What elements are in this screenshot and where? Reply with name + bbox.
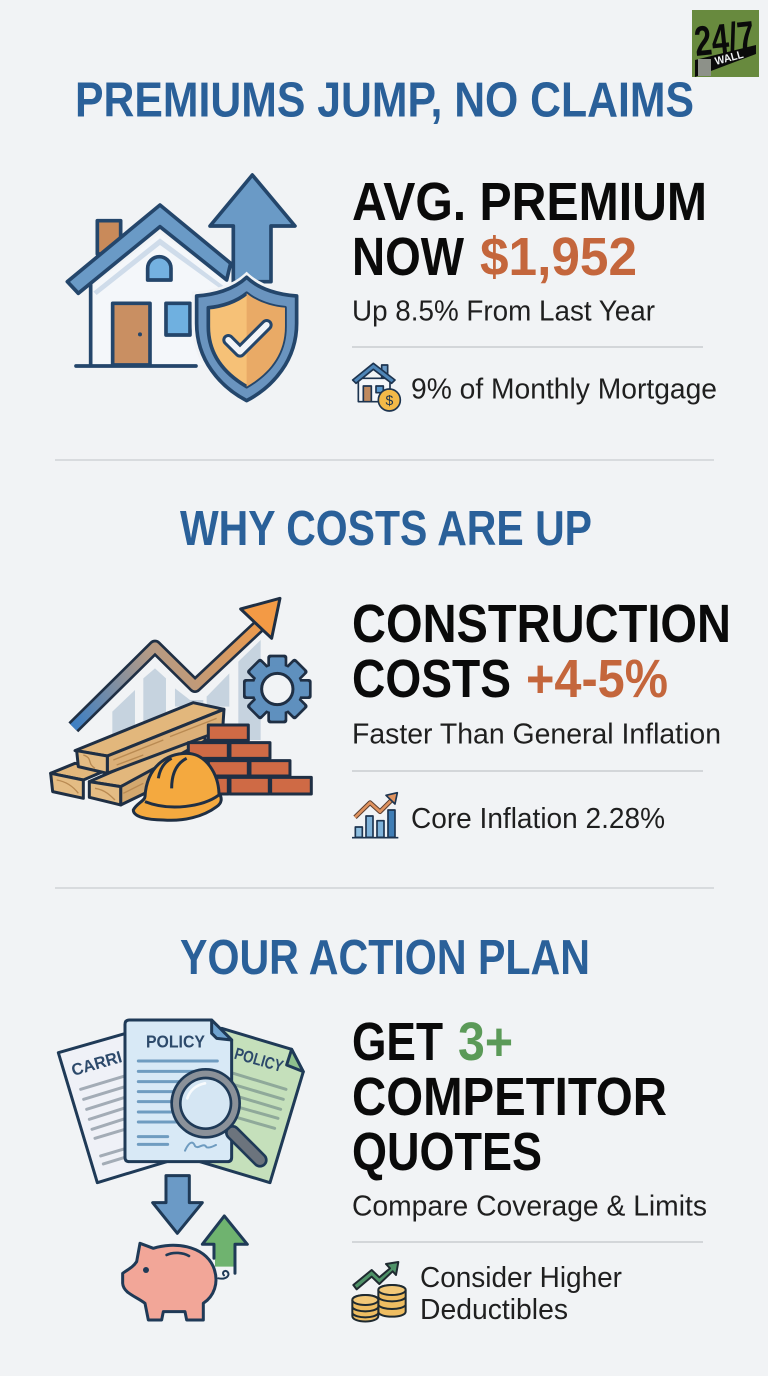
detail: consider higher deductibles: Consider Higher <box>420 1262 622 1294</box>
headline: quotes: QUOTES <box>352 1122 542 1182</box>
headline: cost increase: +4-5% <box>526 649 668 709</box>
headline: premium amount: $1,952 <box>480 227 637 287</box>
icon: house with dollar coin <box>353 363 400 411</box>
heading: your action plan: YOUR ACTION PLAN <box>180 931 590 985</box>
icon: policy documents, magnifier and piggy bank: CARRI <box>69 1047 124 1080</box>
title: PREMIUMS JUMP, NO CLAIMS <box>75 74 694 128</box>
headline: costs label: COSTS <box>352 649 511 709</box>
detail: share of mortgage: 9% of Monthly Mortgage <box>411 374 717 406</box>
logo: 24/7 Wall St: WALL <box>714 49 745 68</box>
detail: core inflation: Core Inflation 2.28% <box>411 803 665 835</box>
detail: consider higher deductibles <box>420 1262 622 1326</box>
icon: policy documents, magnifier and piggy bank <box>58 1020 303 1320</box>
panel: average premium <box>67 172 717 411</box>
headline: number of quotes: 3+ <box>458 1012 513 1072</box>
heading: why costs are up: WHY COSTS ARE UP <box>180 502 592 556</box>
panel: action plan <box>58 1012 707 1326</box>
headline: get: GET <box>352 1012 443 1072</box>
headline: competitor: COMPETITOR <box>352 1067 667 1127</box>
icon: coin stacks with rising arrow <box>352 1262 406 1321</box>
panel: construction costs <box>51 594 731 838</box>
subtext: compared with inflation: Faster Than General Inflation <box>352 718 721 750</box>
headline: now label: NOW <box>352 227 464 287</box>
subtext: compare coverage: Compare Coverage & Limits <box>352 1190 707 1222</box>
icon: policy documents, magnifier and piggy bank: POLICY <box>232 1044 286 1076</box>
icon: house with shield and up arrow <box>67 175 302 406</box>
icon: rising chart with lumber, bricks and hard hat <box>51 598 312 820</box>
icon: house with dollar coin: $ <box>385 392 393 408</box>
subtext: year-over-year change: Up 8.5% From Last Year <box>352 296 655 328</box>
icon: policy documents, magnifier and piggy bank: POLICY <box>146 1031 205 1051</box>
icon: small bar chart with arrow <box>352 793 398 838</box>
headline: average premium: AVG. PREMIUM <box>352 172 707 232</box>
detail: consider higher deductibles: Deductibles <box>420 1294 568 1326</box>
